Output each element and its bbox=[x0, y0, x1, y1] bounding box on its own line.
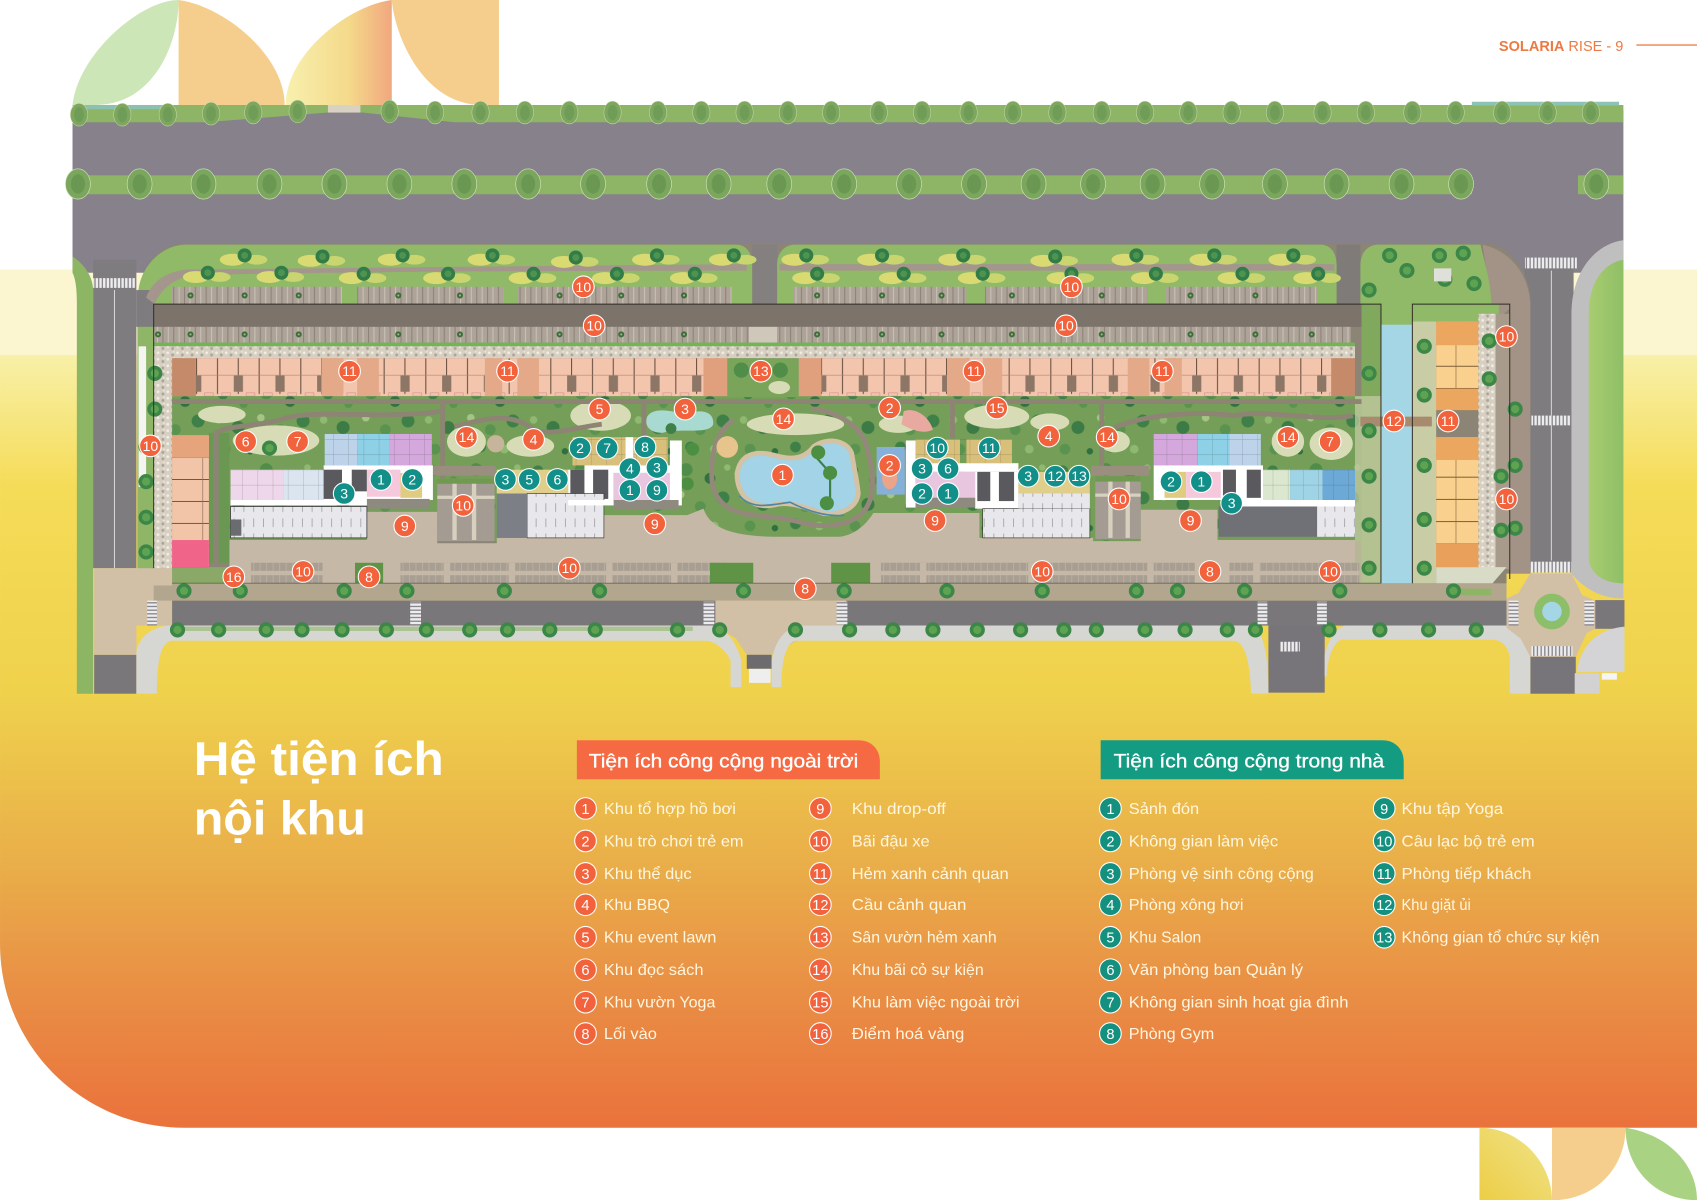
outdoor amenity markers on map: 11 bbox=[342, 363, 357, 379]
item 12: 12 bbox=[812, 898, 828, 914]
item 11: 11 bbox=[1377, 867, 1392, 883]
item 9: Khu tập Yoga bbox=[1402, 801, 1504, 818]
outdoor amenity markers on map: 11 bbox=[967, 363, 982, 379]
item 8 bbox=[1100, 1023, 1214, 1044]
heading: indoor amenities: Tiện ích công cộng trong nhà bbox=[1114, 750, 1384, 772]
item 10: 10 bbox=[812, 834, 828, 850]
indoor amenity markers on map: 3 bbox=[653, 460, 661, 476]
indoor amenity markers on map: 4 bbox=[626, 461, 634, 477]
outdoor amenity markers on map: 16 bbox=[226, 569, 242, 585]
outdoor amenity markers on map: 10 bbox=[1322, 563, 1338, 579]
item 2 bbox=[1100, 830, 1278, 852]
item 5: Khu Salon bbox=[1129, 930, 1201, 947]
item 3 bbox=[1100, 863, 1314, 884]
building C bbox=[906, 439, 1090, 538]
legend: indoor amenities bbox=[1100, 798, 1600, 1044]
shophouses top row bbox=[172, 358, 1355, 397]
outdoor amenity markers on map: 10 bbox=[561, 560, 577, 576]
outdoor amenity markers on map: 2 bbox=[886, 400, 894, 416]
item 11: 11 bbox=[813, 867, 828, 883]
forecourt and plaza parking bbox=[251, 476, 1359, 583]
indoor amenity markers on map: 3 bbox=[918, 461, 926, 477]
outdoor amenity markers on map: 14 bbox=[776, 411, 792, 427]
item 11: Phòng tiếp khách bbox=[1402, 866, 1531, 883]
item 13: 13 bbox=[1376, 931, 1392, 947]
outdoor amenity markers on map: 8 bbox=[801, 581, 809, 597]
indoor amenity markers on map: 5 bbox=[525, 471, 533, 487]
outdoor amenity markers on map: 10 bbox=[295, 563, 311, 579]
road link and side paths bbox=[136, 245, 1530, 574]
item 1 bbox=[1100, 798, 1199, 819]
site base bbox=[137, 244, 1530, 601]
splash pond and playgrounds bbox=[646, 410, 933, 495]
title: nội khu bbox=[194, 792, 366, 845]
indoor amenity markers on map: 3 bbox=[1024, 468, 1032, 484]
outdoor amenity markers on map: 10 bbox=[586, 318, 602, 334]
outdoor amenity markers on map: 9 bbox=[931, 513, 939, 529]
outdoor amenity markers on map: 14 bbox=[1099, 429, 1115, 445]
item 6: 6 bbox=[581, 963, 590, 979]
heading: outdoor amenities: Tiện ích công cộng ngoài trời bbox=[589, 750, 858, 772]
item 7: 7 bbox=[1106, 996, 1114, 1012]
shophouses right columns bbox=[1436, 321, 1478, 567]
outdoor amenity markers on map: 9 bbox=[401, 518, 409, 534]
item 9 bbox=[810, 798, 947, 819]
item 4 bbox=[575, 894, 670, 916]
item 2: Không gian làm việc bbox=[1129, 833, 1278, 850]
decorative leaves top bbox=[73, 0, 499, 105]
outdoor amenity markers on map: 14 bbox=[1280, 429, 1296, 445]
indoor amenity markers on map: 3 bbox=[1228, 495, 1236, 511]
garden ground bbox=[172, 396, 1361, 541]
item 14 bbox=[810, 959, 984, 981]
item 15: 15 bbox=[812, 996, 828, 1012]
item 3: 3 bbox=[1106, 867, 1114, 883]
sidewalk belt with trees bbox=[172, 583, 1507, 601]
item 6 bbox=[1100, 959, 1303, 981]
item 13: Sân vườn hẻm xanh bbox=[852, 930, 997, 947]
background gradient panel bbox=[0, 269, 1697, 1128]
item 8: 8 bbox=[1106, 1027, 1114, 1043]
item 14: Khu bãi cỏ sự kiện bbox=[852, 962, 984, 979]
item 1: 1 bbox=[1106, 802, 1114, 818]
item 12 bbox=[810, 894, 966, 916]
title: Hệ tiện ích bbox=[194, 733, 444, 786]
item 15: Khu làm việc ngoài trời bbox=[852, 995, 1019, 1012]
outdoor amenity markers on map: 10 bbox=[1499, 491, 1515, 507]
heading: outdoor amenities bbox=[577, 740, 880, 779]
item 10 bbox=[1373, 830, 1535, 852]
item 16 bbox=[810, 1023, 964, 1044]
item 15 bbox=[810, 991, 1019, 1013]
indoor amenity markers on map: 12 bbox=[1047, 468, 1063, 484]
indoor amenity markers on map: 2 bbox=[576, 440, 584, 456]
item 6: Văn phòng ban Quản lý bbox=[1129, 962, 1303, 979]
item 7 bbox=[575, 991, 716, 1013]
item 7: 7 bbox=[581, 996, 590, 1012]
outdoor amenity markers on map: 9 bbox=[1187, 513, 1195, 529]
item 10: 10 bbox=[1376, 834, 1392, 850]
item 16: 16 bbox=[812, 1027, 828, 1043]
indoor amenity markers on map: 8 bbox=[641, 439, 649, 455]
top verge with trees bbox=[70, 100, 1623, 126]
roundabout bbox=[1507, 574, 1624, 694]
indoor amenity markers on map: 1 bbox=[377, 471, 385, 487]
item 11 bbox=[810, 863, 1009, 884]
canal and bridge bbox=[1355, 304, 1523, 585]
outdoor amenity markers on map: 5 bbox=[596, 401, 604, 417]
outdoor amenity markers on map: 10 bbox=[1111, 491, 1127, 507]
outdoor amenity markers on map: 10 bbox=[1064, 279, 1079, 295]
outdoor amenity markers on map: 7 bbox=[294, 434, 302, 450]
indoor amenity markers on map: 6 bbox=[944, 461, 952, 477]
building D bbox=[1154, 434, 1355, 537]
item 10: Bãi đậu xe bbox=[852, 833, 930, 850]
item 3: 3 bbox=[581, 867, 590, 883]
item 13 bbox=[810, 926, 997, 948]
item 5 bbox=[1100, 926, 1201, 948]
garden lawns bbox=[198, 400, 1353, 460]
indoor amenity markers on map: 7 bbox=[603, 440, 611, 456]
outdoor amenity markers on map: 8 bbox=[365, 569, 373, 585]
outdoor amenity markers on map: 10 bbox=[1034, 563, 1050, 579]
shophouses left column bbox=[172, 435, 209, 567]
outdoor amenity markers on map: 10 bbox=[1499, 329, 1515, 345]
indoor amenity markers on map: 2 bbox=[918, 485, 926, 501]
outdoor amenity markers on map: 14 bbox=[459, 429, 474, 445]
road median with trees bbox=[65, 169, 1623, 199]
internal drive aisle and parking bbox=[154, 304, 1381, 358]
item 8 bbox=[575, 1023, 657, 1044]
item 2 bbox=[575, 830, 744, 852]
outdoor amenity markers on map: 2 bbox=[886, 457, 894, 473]
indoor amenity markers on map: 9 bbox=[653, 482, 661, 498]
item 4: Khu BBQ bbox=[604, 897, 670, 914]
left gravel and roadside trees bbox=[137, 327, 229, 587]
item 13: 13 bbox=[812, 931, 828, 947]
outdoor amenity markers on map: 15 bbox=[989, 400, 1005, 416]
item 8: Phòng Gym bbox=[1129, 1026, 1214, 1043]
outdoor amenity markers on map bbox=[140, 276, 1517, 600]
outdoor amenity markers on map: 10 bbox=[143, 438, 158, 454]
indoor amenity markers on map: 2 bbox=[408, 471, 416, 487]
item 9: 9 bbox=[816, 802, 824, 818]
item 1 bbox=[575, 798, 736, 819]
item 4: 4 bbox=[1106, 898, 1114, 914]
item 6 bbox=[575, 959, 703, 981]
item 9 bbox=[1373, 798, 1504, 819]
item 7 bbox=[1100, 991, 1348, 1013]
title bbox=[194, 733, 444, 845]
site master plan bbox=[65, 100, 1624, 694]
item 5: Khu event lawn bbox=[604, 930, 716, 947]
front street bbox=[94, 568, 1530, 694]
outdoor amenity markers on map: 1 bbox=[779, 467, 787, 483]
item 10 bbox=[810, 830, 930, 852]
indoor amenity markers on map bbox=[333, 436, 1242, 514]
outdoor amenity markers on map: 10 bbox=[1058, 318, 1074, 334]
legend: outdoor amenities bbox=[575, 798, 1019, 1044]
item 2: 2 bbox=[1106, 834, 1114, 850]
item 6: 6 bbox=[1106, 963, 1114, 979]
item 5 bbox=[575, 926, 716, 948]
outdoor amenity markers on map: 10 bbox=[576, 279, 591, 295]
item 12: Khu giặt ủi bbox=[1402, 897, 1471, 914]
item 1: 1 bbox=[581, 802, 590, 818]
item 13: Không gian tổ chức sự kiện bbox=[1402, 929, 1600, 947]
outdoor amenity markers on map: 3 bbox=[681, 401, 689, 417]
page header: SOLARIA RISE - 9: SOLARIA RISE - 9 bbox=[1499, 39, 1623, 55]
item 4 bbox=[1100, 894, 1244, 916]
outdoor amenity markers on map: 4 bbox=[1045, 428, 1053, 444]
indoor amenity markers on map: 1 bbox=[944, 485, 952, 501]
zebra crossings bbox=[93, 258, 1594, 656]
indoor amenity markers on map: 2 bbox=[1167, 474, 1175, 490]
outdoor amenity markers on map: 13 bbox=[753, 363, 769, 379]
item 8: 8 bbox=[581, 1027, 590, 1043]
item 6: Khu đọc sách bbox=[604, 962, 703, 979]
item 1: Sảnh đón bbox=[1129, 801, 1199, 818]
building B bbox=[497, 437, 682, 538]
indoor amenity markers on map: 13 bbox=[1071, 468, 1087, 484]
front green belts with parking bbox=[139, 245, 1492, 325]
item 4: 4 bbox=[581, 898, 590, 914]
heading: indoor amenities bbox=[1101, 740, 1404, 779]
item 2: Khu trò chơi trẻ em bbox=[604, 833, 744, 850]
item 3 bbox=[575, 863, 692, 884]
item 7: Không gian sinh hoạt gia đình bbox=[1129, 995, 1349, 1012]
item 9: 9 bbox=[1380, 802, 1388, 818]
item 1: Khu tổ hợp hồ bơi bbox=[604, 800, 736, 818]
outdoor amenity markers on map: 7 bbox=[1326, 434, 1334, 450]
item 3: Phòng vệ sinh công cộng bbox=[1129, 866, 1314, 883]
main roads bbox=[73, 110, 1623, 694]
decorative leaves bottom right bbox=[1479, 1128, 1697, 1200]
item 12: Cầu cảnh quan bbox=[852, 897, 966, 914]
item 16: Điểm hoá vàng bbox=[852, 1025, 964, 1043]
outdoor amenity markers on map: 11 bbox=[1155, 363, 1170, 379]
item 3: Khu thể dục bbox=[604, 865, 692, 883]
pool complex bbox=[681, 409, 872, 526]
indoor amenity markers on map: 6 bbox=[553, 471, 561, 487]
indoor amenity markers on map: 1 bbox=[1197, 474, 1205, 490]
indoor amenity markers on map: 3 bbox=[502, 471, 510, 487]
outdoor amenity markers on map: 8 bbox=[1206, 563, 1214, 579]
item 7: Khu vườn Yoga bbox=[604, 995, 716, 1012]
item 14: 14 bbox=[812, 963, 828, 979]
site boundary line bbox=[154, 304, 1510, 583]
indoor amenity markers on map: 1 bbox=[626, 482, 634, 498]
outdoor amenity markers on map: 4 bbox=[530, 431, 538, 447]
garden paths bbox=[172, 402, 1361, 478]
item 12 bbox=[1373, 894, 1471, 916]
item 5: 5 bbox=[1106, 931, 1114, 947]
item 11 bbox=[1373, 863, 1531, 884]
item 10: Câu lạc bộ trẻ em bbox=[1402, 833, 1535, 850]
outdoor amenity markers on map: 9 bbox=[651, 516, 659, 532]
outdoor amenity markers on map: 12 bbox=[1386, 413, 1402, 429]
indoor amenity markers on map: 10 bbox=[929, 440, 945, 456]
item 4: Phòng xông hơi bbox=[1129, 897, 1244, 914]
item 2: 2 bbox=[581, 834, 590, 850]
item 8: Lối vào bbox=[604, 1026, 657, 1043]
item 13 bbox=[1373, 926, 1600, 948]
indoor amenity markers on map: 3 bbox=[340, 485, 348, 501]
indoor amenity markers on map: 11 bbox=[982, 440, 997, 456]
outdoor amenity markers on map: 6 bbox=[242, 434, 250, 450]
item 5: 5 bbox=[581, 931, 590, 947]
plaza drop-off bbox=[229, 509, 1355, 583]
item 12: 12 bbox=[1376, 898, 1392, 914]
item 9: Khu drop-off bbox=[852, 801, 947, 818]
outdoor amenity markers on map: 11 bbox=[1441, 413, 1456, 429]
item 11: Hẻm xanh cảnh quan bbox=[852, 866, 1009, 883]
outdoor amenity markers on map: 11 bbox=[500, 363, 515, 379]
outdoor amenity markers on map: 10 bbox=[455, 497, 471, 513]
building A bbox=[231, 434, 433, 538]
